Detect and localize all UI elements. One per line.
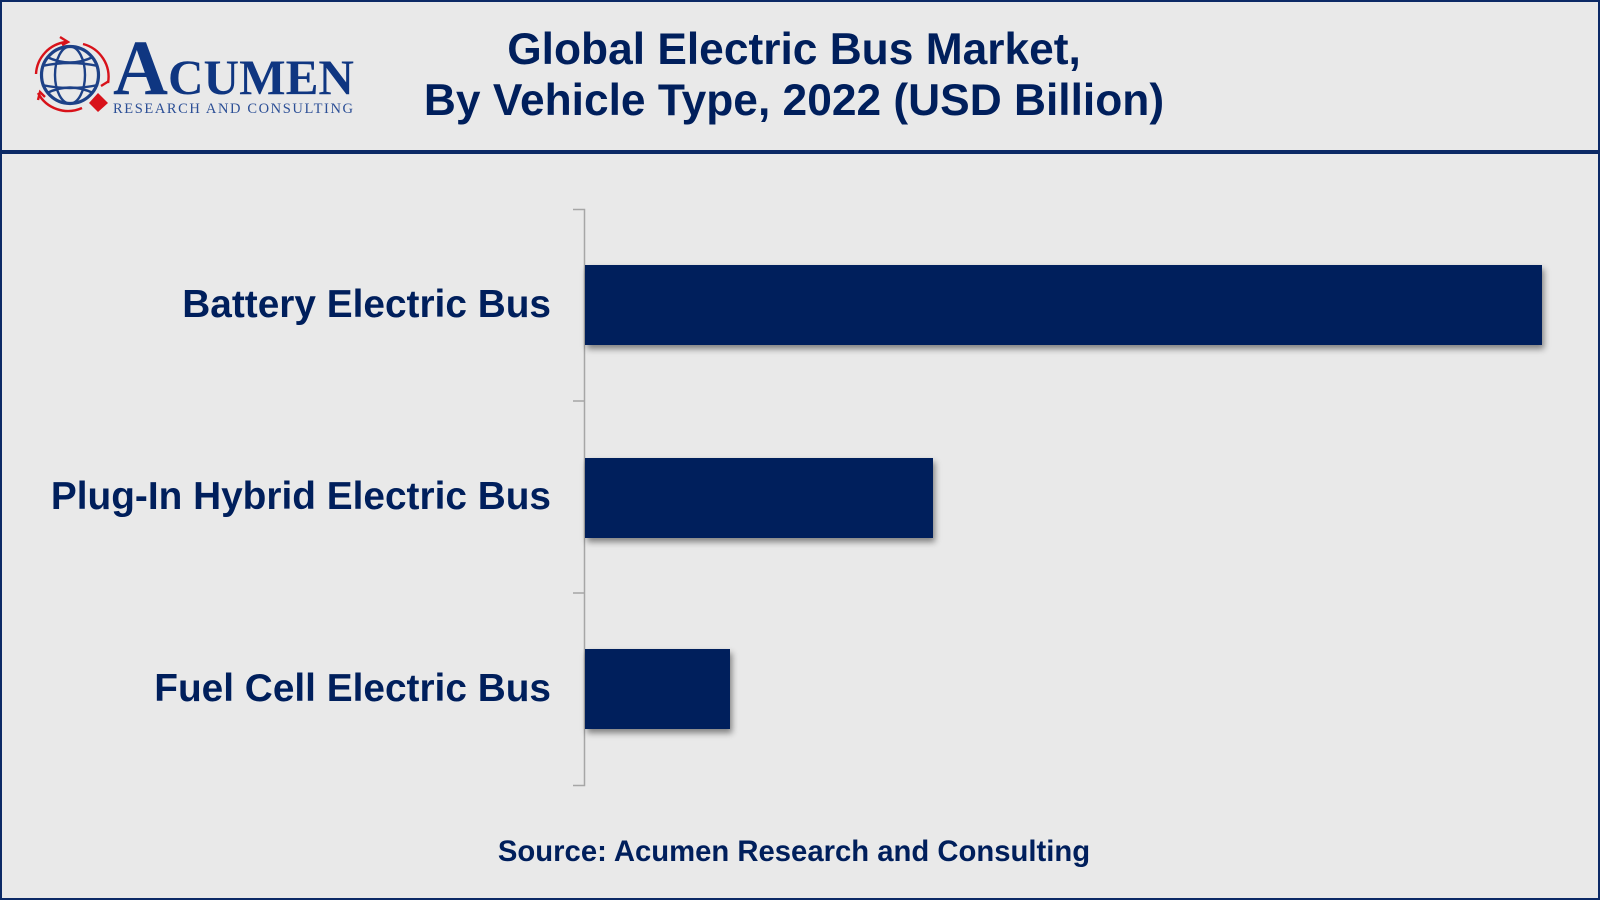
wordmark: CUMEN xyxy=(168,49,354,105)
tagline: RESEARCH AND CONSULTING xyxy=(113,101,354,117)
bar xyxy=(585,649,730,729)
wordmark xyxy=(113,24,354,111)
chart axis xyxy=(573,208,586,786)
bar xyxy=(585,458,933,538)
header divider xyxy=(0,150,1600,154)
icon: globe with arrows xyxy=(36,37,109,112)
title: Global Electric Bus Market, xyxy=(507,25,1081,74)
bar xyxy=(585,265,1542,345)
category label: Battery Electric Bus xyxy=(182,283,551,326)
source note: Source: Acumen Research and Consulting xyxy=(498,836,1090,868)
row: Battery Electric Bus xyxy=(182,264,1548,354)
row: Fuel Cell Electric Bus xyxy=(154,648,736,738)
title xyxy=(424,25,1164,125)
title: By Vehicle Type, 2022 (USD Billion) xyxy=(424,76,1164,125)
logo: Acumen Research and Consulting xyxy=(34,30,354,117)
category label: Plug-In Hybrid Electric Bus xyxy=(51,475,551,518)
row: Plug-In Hybrid Electric Bus xyxy=(51,458,940,546)
category label: Fuel Cell Electric Bus xyxy=(154,667,551,710)
